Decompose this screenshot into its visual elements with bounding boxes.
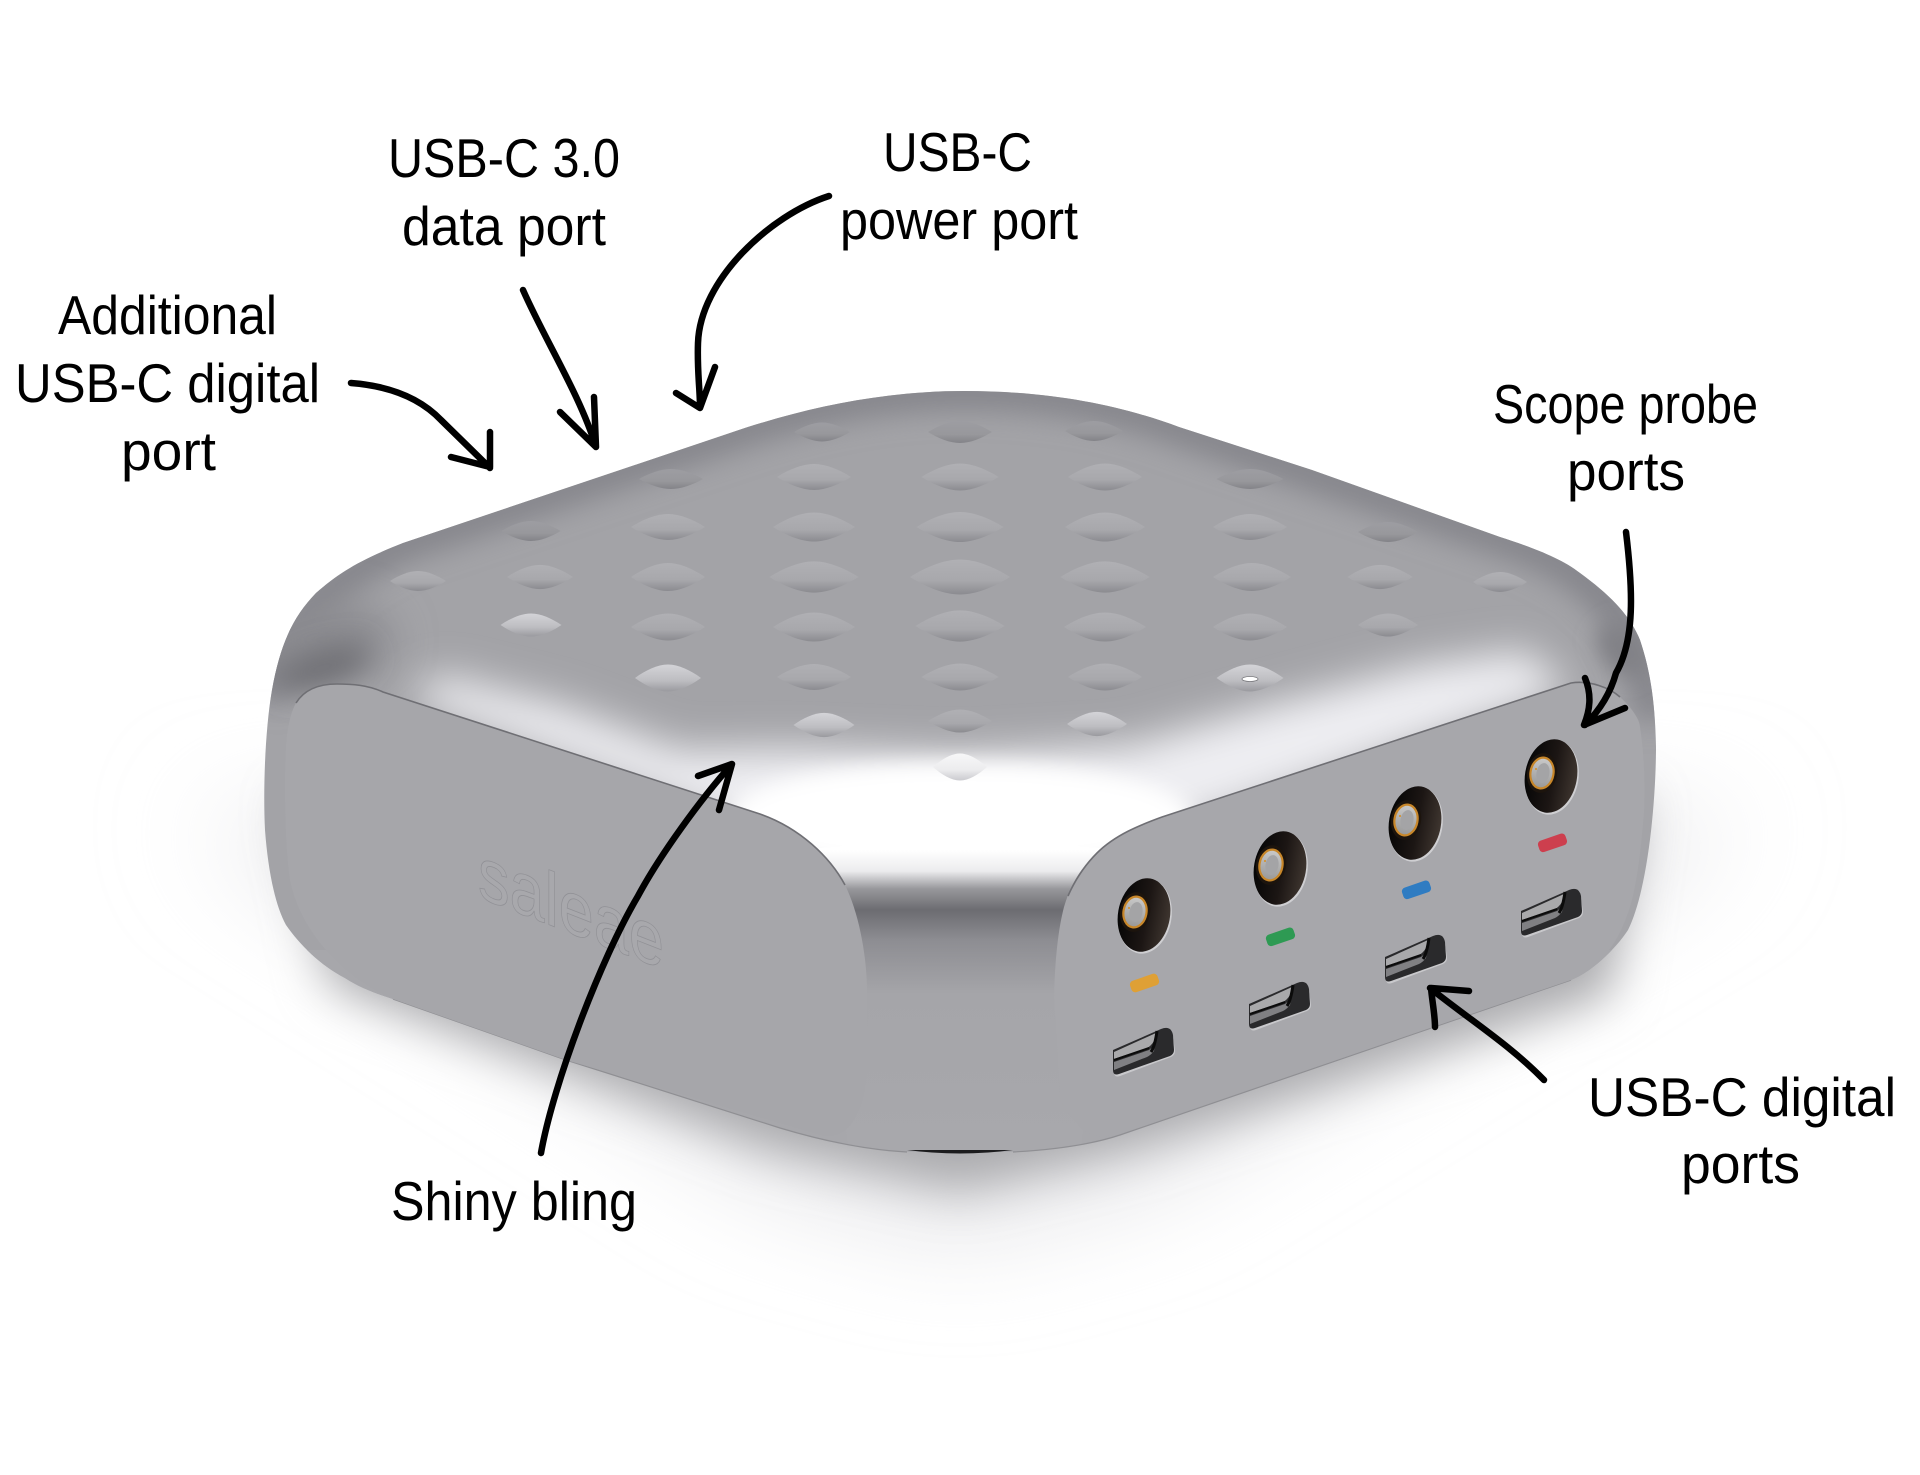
label: USB-C 3.0 data port [388,127,620,257]
label: USB-C power port: power port [840,189,1078,251]
label: USB-C digital ports: ports [1681,1133,1800,1195]
yellow indicator [1129,973,1160,993]
USB-C port 2 [1249,982,1311,1030]
USB-C port 1 [1113,1028,1175,1076]
USB-C port 4 [1521,889,1583,938]
scope probe port 3 [1383,782,1449,866]
scope probe port 1 [1112,874,1178,958]
panel: left face with logo [285,684,867,1136]
label: USB-C power port: USB-C [883,121,1032,183]
top dimple grid [390,421,1527,780]
label: USB-C 3.0 data port: data port [402,195,606,257]
label: USB-C 3.0 data port: USB-C 3.0 [388,127,620,189]
green indicator [1265,926,1296,947]
arrow: data port [523,290,596,447]
arrow: USB-C digital ports [1430,988,1544,1080]
label: USB-C digital ports: USB-C digital [1588,1066,1896,1128]
label: Scope probe ports [1493,373,1758,502]
label: Scope probe ports: ports [1567,440,1685,502]
device body [250,380,1670,1160]
arrow: additional USB-C port [351,383,490,468]
label: Scope probe ports: Scope probe [1493,373,1758,435]
red indicator [1537,832,1568,853]
label: Additional USB-C digital port: port [121,420,216,482]
foot [907,1150,1013,1154]
arrow: power port [676,196,829,408]
arrow: shiny bling [541,764,732,1153]
drop shadow under the device [190,800,1750,1235]
blue indicator [1401,879,1432,900]
lower edge line [393,980,1571,1152]
embossed logo: saleae [478,829,664,986]
panel: right face with ports [1054,682,1645,1136]
label: USB-C power port [840,121,1078,251]
label: Additional USB-C digital port: Additional [58,284,277,346]
USB-C port 3 [1385,935,1447,984]
scope probe port 4 [1519,735,1585,819]
label: USB-C digital ports [1588,1066,1896,1195]
arrow: scope probe ports [1584,532,1631,725]
metal top surface shading [250,380,1670,1160]
label: Additional USB-C digital port [15,284,320,482]
label: Shiny bling: Shiny bling [391,1170,637,1232]
scope probe port 2 [1248,827,1314,911]
label: Additional USB-C digital port: USB-C digital [15,352,320,414]
